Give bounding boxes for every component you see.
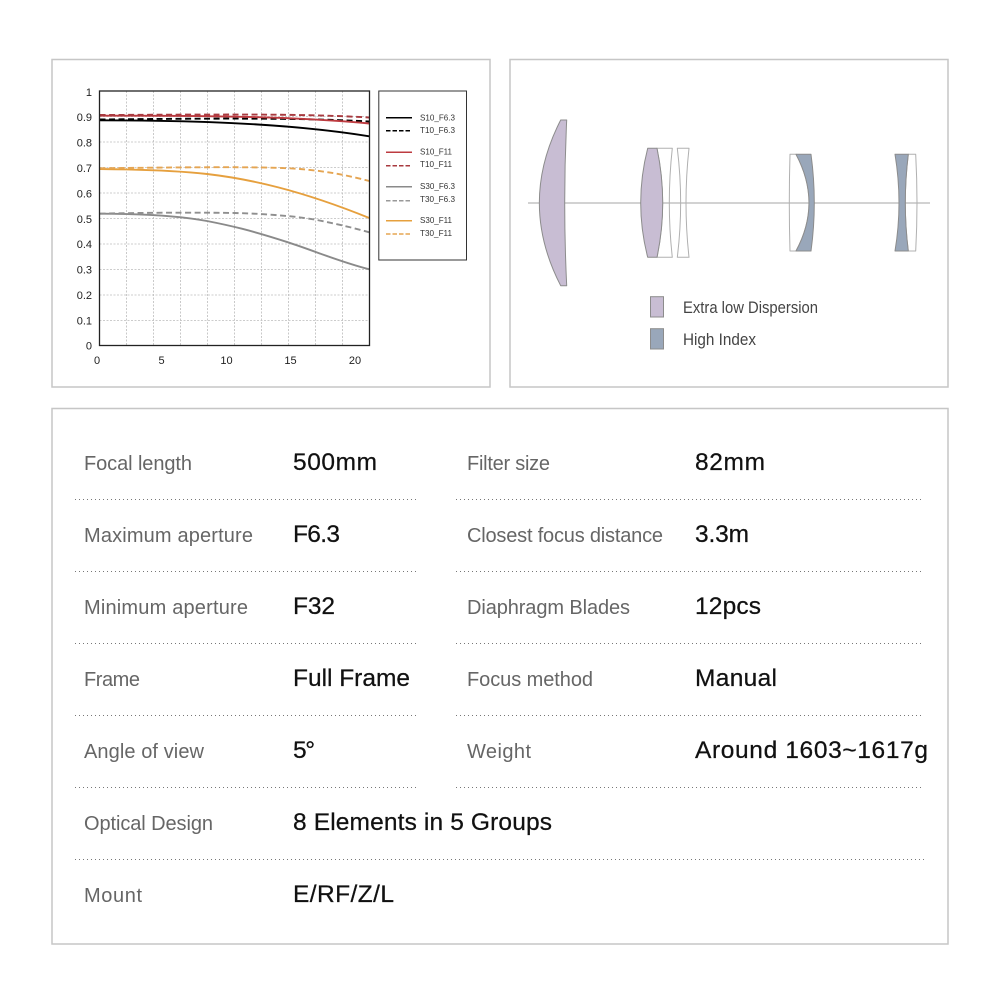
y axis labels: 0.2 [77,290,92,302]
chart legend: T30_F11 [420,228,452,238]
spec: closest focus distance [467,521,749,548]
spec: filter size: Filter size [467,453,550,475]
x axis labels: 10 [220,355,233,367]
spec: closest focus distance: 3.3m [695,521,749,548]
chart legend: S30_F11 [420,215,452,225]
spec: optical design: Optical Design [84,813,213,835]
y axis labels: 0.3 [77,264,92,276]
legend: extra low dispersion: Extra low Dispersion [683,299,818,317]
y axis labels: 0.4 [77,239,92,251]
spec: maximum aperture: F6.3 [293,521,340,548]
spec: focal length [84,449,377,476]
y axis labels: 0.6 [77,188,92,200]
spec: minimum aperture [84,593,335,620]
MTF line chart [100,91,370,346]
spec: maximum aperture [84,521,340,548]
lens group 1 [539,120,567,286]
spec: minimum aperture: F32 [293,593,335,620]
chart legend: S30_F6.3 [420,181,455,191]
x axis labels: 5 [158,355,165,367]
y axis labels: 0.8 [77,138,92,150]
lens group 3 [677,148,689,257]
x axis labels: 0 [94,355,100,367]
spec: angle of view: 5° [293,737,315,764]
spec: focal length: 500mm [293,449,377,476]
spec: frame: Frame [84,669,140,691]
spec: focus method [467,665,777,692]
spec: weight: Around 1603~1617g [695,737,928,764]
spec: diaphragm blades [467,593,761,620]
y axis labels: 1 [86,87,92,99]
y axis labels: 0.7 [77,163,92,175]
spec: frame [84,665,410,692]
spec: minimum aperture: Minimum aperture [84,597,248,619]
x axis labels [94,355,361,367]
chart legend [379,91,466,260]
spec: weight [467,737,928,764]
spec: frame: Full Frame [293,665,410,692]
lens group 4 [789,154,814,251]
spec: mount: Mount [84,885,142,907]
y axis labels: 0.9 [77,112,92,124]
chart legend: T30_F6.3 [420,194,455,204]
chart legend: T10_F6.3 [420,125,455,135]
spec: angle of view: Angle of view [84,741,205,763]
spec: filter size [467,449,765,476]
spec: mount: E/RF/Z/L [293,881,394,908]
spec: maximum aperture: Maximum aperture [84,525,253,547]
chart legend: T10_F11 [420,159,452,169]
spec: focal length: Focal length [84,453,192,475]
chart legend: S10_F6.3 [420,112,455,122]
panel: optical diagram [510,60,948,387]
spec: diaphragm blades: 12pcs [695,593,761,620]
y axis labels [77,87,92,352]
lens group 2 [641,148,672,257]
spec: closest focus distance: Closest focus distance [467,525,663,547]
x axis labels: 20 [349,355,361,367]
y axis labels: 0 [86,340,92,352]
legend: extra low dispersion [650,297,818,317]
spec: optical design [84,809,552,836]
x axis labels: 15 [284,355,297,367]
spec: diaphragm blades: Diaphragm Blades [467,597,630,619]
spec: angle of view [84,737,315,764]
lens group 5 [895,154,917,251]
panel: MTF chart [52,60,490,387]
chart legend: S10_F11 [420,146,452,156]
optical axis [528,202,930,204]
spec: filter size: 82mm [695,449,765,476]
y axis labels: 0.1 [77,316,92,328]
spec: mount [84,881,394,908]
spec: focus method: Manual [695,665,777,692]
spec: weight: Weight [467,741,531,763]
legend: high index: High Index [683,331,757,349]
spec: optical design: 8 Elements in 5 Groups [293,809,552,836]
spec: focus method: Focus method [467,669,593,691]
panel: specifications [52,408,948,944]
legend: high index [650,329,757,349]
y axis labels: 0.5 [77,214,92,226]
